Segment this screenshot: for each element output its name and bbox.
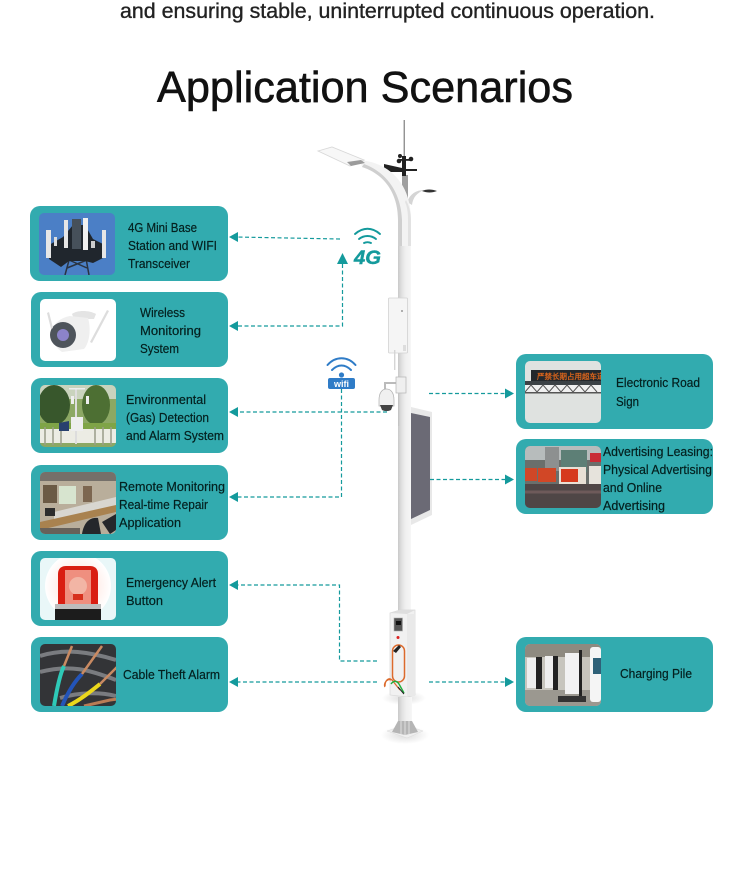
panel: cable theft alarm: [31, 637, 228, 712]
label: and Online: [603, 481, 662, 495]
label: (Gas) Detection: [126, 411, 209, 425]
icon: 4G wireless: 4G: [353, 248, 381, 269]
arrow: camera to environmental detection: [229, 407, 387, 417]
wireless box: [388, 298, 408, 370]
label: and Alarm System: [126, 429, 224, 443]
label: Button: [126, 594, 163, 608]
arrow: emergency alert: [229, 580, 377, 661]
panel: wireless monitoring: [31, 292, 228, 367]
icon: wifi badge: wifi: [333, 379, 349, 389]
arrow: charging pile: [429, 677, 514, 687]
label: [128, 221, 217, 271]
label: Transceiver: [128, 257, 190, 271]
photo: charging stations: [525, 644, 601, 706]
label: Advertising: [603, 499, 665, 513]
photo: LED road sign: 严禁长期占用超车道: [536, 371, 605, 381]
label: Wireless: [140, 306, 185, 320]
photo: wifi camera: [40, 299, 116, 361]
label: [603, 445, 713, 513]
label: Sign: [616, 395, 639, 409]
label: Environmental: [126, 393, 206, 407]
charging cable: [384, 645, 404, 694]
label: Charging Pile: [620, 667, 692, 681]
icon: wifi badge: [328, 358, 356, 389]
label: Remote Monitoring: [119, 480, 225, 494]
label: 4G Mini Base: [128, 221, 197, 235]
label: [616, 376, 700, 409]
label: Real-time Repair: [119, 498, 208, 512]
small side lamp: [407, 190, 424, 205]
arrow: base station link: [229, 232, 340, 242]
intro text line: and ensuring stable, uninterrupted continuous operation.: [120, 0, 655, 23]
advertising screen: [411, 407, 432, 525]
photo: control room: [40, 472, 116, 534]
panel: 4G mini base station: [30, 206, 228, 281]
panel: emergency alert: [31, 551, 228, 626]
label: System: [140, 342, 179, 356]
photo: LED trucks: [525, 446, 601, 508]
label: Emergency Alert: [126, 576, 217, 590]
title: Application Scenarios: [157, 63, 573, 112]
photo: LED road sign: [525, 361, 605, 423]
weather station: [384, 154, 417, 201]
photo: cell tower: [39, 213, 115, 275]
PTZ camera: [379, 377, 406, 426]
panel: advertising leasing: [516, 439, 713, 514]
panel: electronic road sign: [516, 354, 713, 429]
charging cabinet: [382, 610, 426, 705]
pole base: [381, 697, 429, 744]
charger display: [394, 618, 402, 631]
icon: 4G wireless: [353, 229, 381, 269]
arrow: 4G to wireless monitoring: [229, 253, 348, 331]
label: Electronic Road: [616, 376, 700, 390]
photo: red beacon: [40, 553, 116, 620]
panel: charging pile: [516, 637, 713, 712]
arrow: advertising leasing: [430, 474, 514, 484]
label: Cable Theft Alarm: [123, 668, 220, 682]
label: [140, 306, 201, 356]
label: [126, 393, 224, 443]
label: Advertising Leasing:: [603, 445, 713, 459]
arrow: wifi to remote monitoring: [229, 389, 342, 502]
photo: monitoring station: [38, 385, 116, 447]
arrow: cable theft alarm: [229, 677, 377, 687]
photo: cables: [40, 644, 118, 706]
antenna: [404, 120, 405, 158]
arrow: electronic road sign: [429, 388, 514, 398]
label: Application: [119, 516, 181, 530]
panel: environmental detection: [31, 378, 228, 453]
label: Station and WIFI: [128, 239, 217, 253]
label: [119, 480, 225, 530]
label: [126, 576, 217, 608]
label: Monitoring: [140, 324, 201, 338]
curved lamp arm: [360, 160, 411, 248]
smart pole illustration: [318, 120, 437, 744]
main lamp head: [318, 147, 365, 166]
label: Physical Advertising: [603, 463, 712, 477]
panel: remote monitoring: [31, 465, 228, 540]
main pole shaft: [398, 246, 411, 612]
